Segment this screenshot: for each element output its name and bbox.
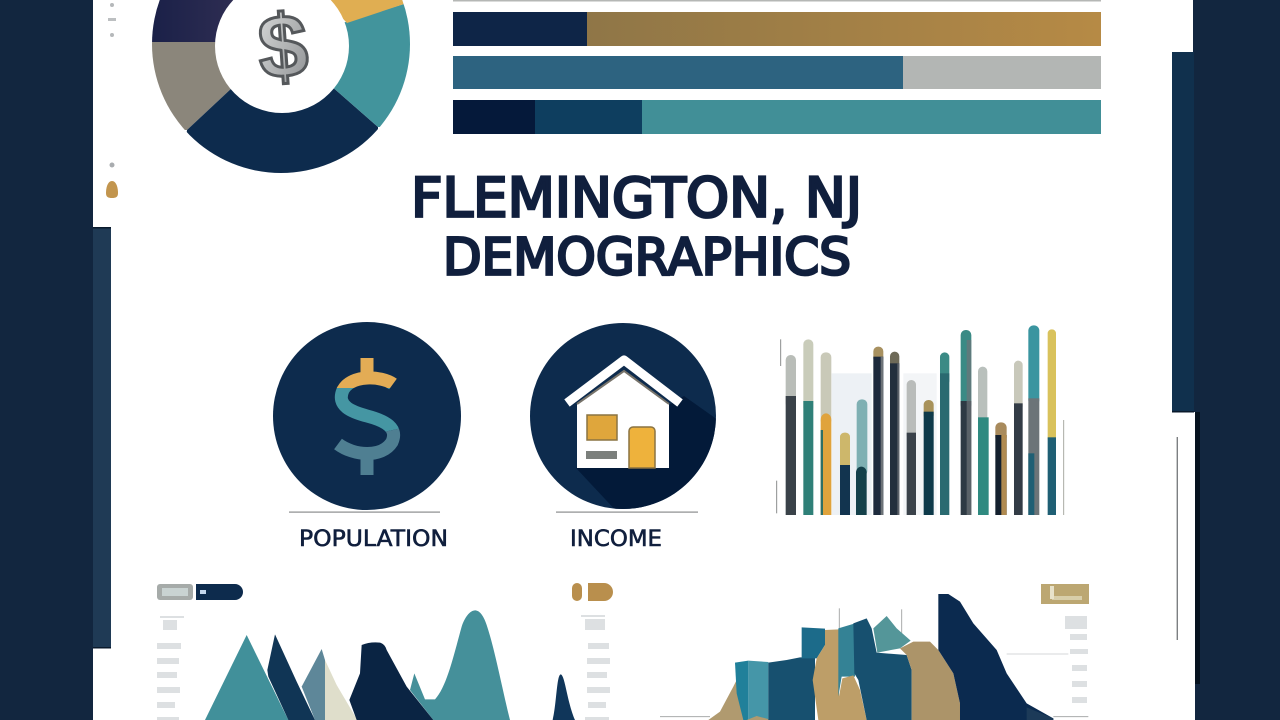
title: DEMOGRAPHICS [443,228,851,288]
bar chart: thin columns [777,325,1064,515]
axis ticks: right side [1065,616,1088,703]
panel: right navy sidebar [1172,0,1280,720]
axis ticks: centre column [581,615,610,720]
axis ticks: left mountain chart, left side [157,616,184,720]
legend: right gold marker [1041,584,1089,604]
title [411,166,862,288]
title: FLEMINGTON, NJ [411,166,862,230]
bar: navy and gold [453,12,1101,46]
legend: centre gold markers [572,583,613,601]
legend: left mountain chart [157,584,243,600]
area chart: left mountains [205,610,575,720]
label: income: INCOME [570,527,662,552]
icon: population dollar circle [273,322,461,510]
label: population: POPULATION [299,527,448,552]
legend markers: left margin [106,3,118,198]
bar: blue and grey [453,56,1101,89]
area chart: right layered mountains [660,594,1088,720]
donut chart [152,0,410,173]
bar: navy, blue and teal [453,100,1101,134]
icon: income house circle [530,323,725,515]
stacked bars [453,0,1101,134]
panel: left navy sidebar [0,0,111,720]
